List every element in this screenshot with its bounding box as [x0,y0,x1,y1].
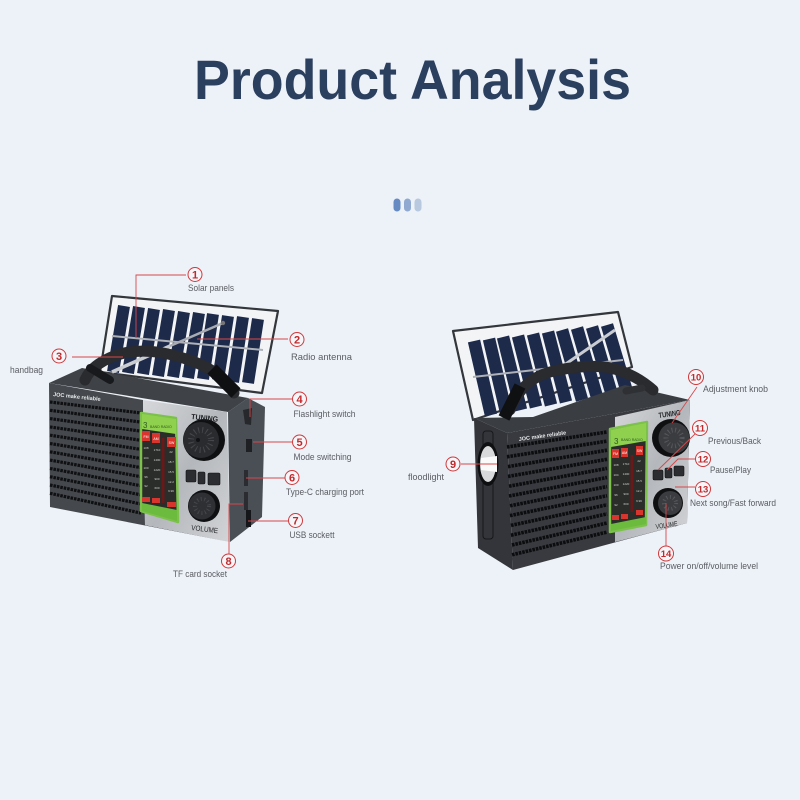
LCD dial, right radio: 1220 [623,482,630,486]
LCD dial, right radio: 9.96 [636,499,642,503]
LCD dial, left radio: 1220 [154,468,161,472]
handle, right radio [504,366,653,418]
volume knob, left radio [188,490,220,522]
LCD dial, right radio: 600 [623,502,629,506]
callout 7: usb socket: 7 [292,516,299,528]
callout 9: floodlight: 9 [450,459,456,471]
control panel, left radio [143,400,230,542]
callout 2: radio antenna: Radio antenna [291,352,353,363]
callout 6: type-c charging port: Type-C charging port [286,487,364,498]
LCD dial, left radio: 22 [169,450,173,454]
LCD dial, right radio: 15.5 [636,479,642,483]
callout 4: flashlight switch [250,392,356,420]
solar panel, right radio [453,312,632,420]
right radio product illustration [453,312,690,570]
LCD dial, right radio: 18.7 [636,469,642,473]
LCD dial, right radio [610,422,647,532]
LCD dial, right radio: AM [622,451,627,455]
callout 1: solar panels: 1 [192,270,198,282]
callout 9: floodlight: floodlight [408,472,444,483]
LCD dial, left radio: 108 [143,446,149,450]
tuning label, right radio: TUNING [658,408,681,420]
callout 14: power on/off/volume level [658,503,758,572]
LCD dial, right radio: 12.2 [636,489,642,493]
floodlight, right radio [478,442,498,486]
tuning label, left radio: TUNING [191,412,219,424]
LCD dial, right radio: FM [613,452,618,456]
callout 11: previous/back: 11 [695,424,706,434]
solar panel, left radio [100,296,278,393]
LCD dial, left radio: SW [169,441,175,445]
title: Product Analysis [194,48,631,111]
LCD dial, left radio: 9.96 [168,489,174,493]
callout 5: mode switching: 5 [296,437,303,449]
speaker grille, right radio [507,432,607,555]
callout 8: tf card socket: TF card socket [173,569,227,580]
callout 3: handbag: handbag [10,365,43,376]
callout 13: next song/fast forward: 13 [698,484,708,496]
LCD dial, right radio: 22 [637,459,641,463]
decorative three dots icon [394,198,422,212]
LCD dial, left radio: 92 [144,484,148,488]
LCD dial, left radio: 100 [143,466,149,470]
tuning knob, left radio [183,419,225,461]
speaker grille, left radio [50,402,141,513]
LCD dial, right radio: BAND RADIO [621,438,643,442]
volume knob, right radio [653,488,683,518]
callout 1: solar panels [136,268,234,338]
radio antenna, right radio [557,330,615,370]
LCD dial, left radio: 600 [154,486,160,490]
callout 7: usb socket [248,514,335,541]
control panel, right radio [615,400,690,542]
LCD dial, left radio: 1710 [154,448,161,452]
LCD dial, right radio: SW [637,449,643,453]
LCD dial, left radio: 104 [143,456,149,460]
callout 13: next song/fast forward [675,482,776,509]
callout 14: power on/off/volume level: Power on/off/volume level [660,561,758,572]
callout 4: flashlight switch: Flashlight switch [294,409,356,420]
callout 1: solar panels: Solar panels [188,283,234,294]
callout 12: pause/play: Pause/Play [710,465,751,476]
callout 10: adjustment knob: 10 [691,372,701,384]
callout 2: radio antenna [197,332,353,363]
callout 14: power on/off/volume level: 14 [661,549,672,560]
LCD dial, right radio: 1710 [623,462,630,466]
LCD dial, right radio: 108 [613,463,619,467]
callout 13: next song/fast forward: Next song/Fast forward [690,498,776,509]
LCD dial, left radio: BAND RADIO [150,425,172,429]
LCD dial, left radio: 900 [154,477,160,481]
callout 12: pause/play: 12 [698,454,708,466]
LCD dial, left radio: AM [153,437,159,441]
radio body, right radio [474,385,690,570]
LCD dial, right radio: 104 [613,473,619,477]
LCD dial, left radio [141,413,178,522]
callout 11: previous/back: Previous/Back [708,436,761,447]
callout 8: tf card socket [173,504,243,580]
brand label, right radio: JOC make reliable [518,430,567,443]
callout 6: type-c charging port: 6 [289,472,295,484]
LCD dial, right radio: 92 [614,503,618,507]
tuning knob, right radio [652,419,690,457]
LCD dial, left radio: 12.2 [168,480,174,484]
callout 9: floodlight [408,457,497,483]
LCD dial, right radio: 100 [613,483,619,487]
callout 2: radio antenna: 2 [294,334,300,346]
playback buttons, left radio [186,470,220,485]
volume label, right radio: VOLUME [655,521,678,531]
LCD dial, right radio: 900 [623,492,629,496]
LCD dial, left radio: 96 [144,475,148,479]
callout 3: handbag [10,349,123,376]
callout 11: previous/back [658,420,761,470]
LCD dial, left radio: 1400 [154,458,161,462]
LCD dial, left radio: 3 [143,421,148,430]
callout 8: tf card socket: 8 [225,556,232,568]
handle, left radio [85,351,236,393]
playback buttons, right radio [653,466,684,480]
callout 4: flashlight switch: 4 [296,394,303,406]
callout 5: mode switching: Mode switching [294,452,352,463]
callout 10: adjustment knob [672,370,768,423]
callout 3: handbag: 3 [56,351,62,363]
LCD dial, left radio: FM [143,435,149,439]
left radio product illustration [49,296,278,542]
LCD dial, left radio: 15.5 [168,470,174,474]
radio antenna, left radio [112,321,225,372]
callout 7: usb socket: USB sockett [290,530,335,541]
volume label, left radio: VOLUME [191,523,219,535]
callout 12: pause/play [667,452,751,476]
radio body, left radio [49,368,265,542]
LCD dial, right radio: 3 [614,437,619,446]
callout 5: mode switching [253,435,352,463]
callout 6: type-c charging port [246,470,364,498]
callout 10: adjustment knob: Adjustment knob [703,384,768,395]
brand label, left radio: JOC make reliable [53,392,101,403]
LCD dial, right radio: 1400 [623,472,630,476]
LCD dial, left radio: 18.7 [168,460,174,464]
LCD dial, right radio: 96 [614,493,618,497]
